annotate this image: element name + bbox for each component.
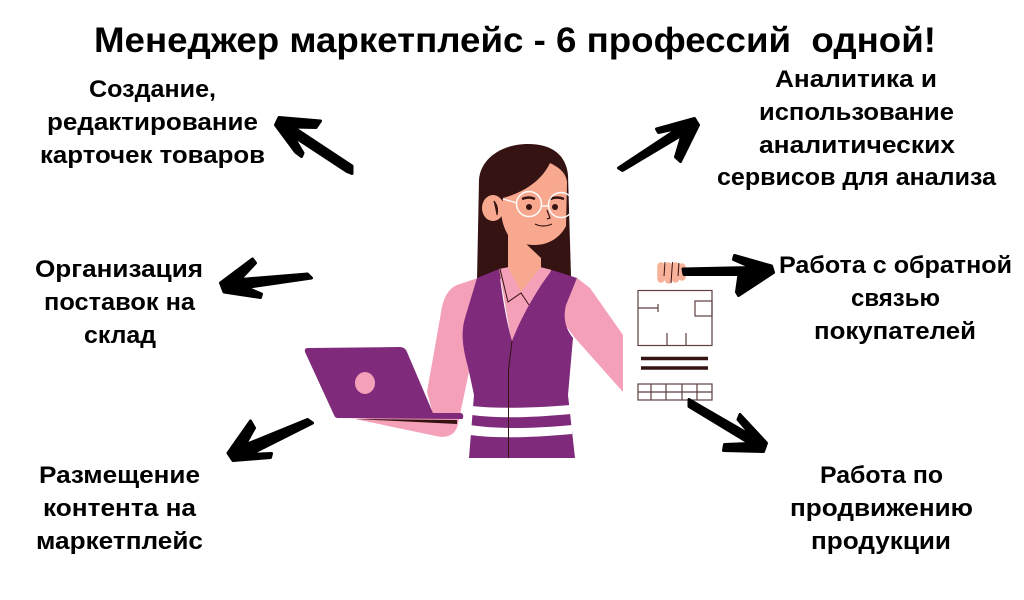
text: analytics bbox=[717, 66, 996, 191]
text: warehouse supply: склад bbox=[84, 322, 156, 349]
arrow: top left bbox=[276, 118, 352, 174]
text: product promotion: продукции bbox=[811, 528, 951, 555]
arrow: top right bbox=[618, 118, 698, 170]
right arm bbox=[560, 278, 623, 392]
hand bbox=[661, 262, 682, 283]
text: card creation: Создание, bbox=[89, 76, 216, 103]
text: content placement: контента на bbox=[43, 495, 196, 522]
neck bbox=[508, 230, 541, 292]
text: card creation bbox=[40, 76, 265, 169]
document bbox=[638, 290, 712, 400]
arrow: middle left bbox=[220, 259, 312, 298]
text: analytics: Аналитика и bbox=[775, 66, 937, 93]
illustration: woman with laptop and document bbox=[305, 144, 712, 458]
text: content placement: Размещение bbox=[39, 462, 200, 489]
laptop bbox=[305, 347, 463, 424]
brows bbox=[522, 198, 564, 199]
vest centre seam bbox=[508, 341, 512, 458]
text: analytics: сервисов для анализа bbox=[717, 164, 996, 191]
arrow: bottom right bbox=[689, 400, 766, 452]
text: product promotion bbox=[790, 462, 973, 555]
arrow: bottom left bbox=[228, 420, 312, 460]
left arm bbox=[355, 278, 480, 437]
text: warehouse supply: Организация bbox=[35, 256, 203, 283]
text: product promotion: продвижению bbox=[790, 495, 973, 522]
shirt front bbox=[499, 267, 552, 345]
text: content placement: маркетплейс bbox=[36, 528, 203, 555]
text: content placement bbox=[36, 462, 203, 555]
text: analytics: использование bbox=[759, 99, 954, 126]
nose and smile bbox=[535, 210, 552, 226]
text: analytics: аналитических bbox=[759, 132, 955, 159]
glasses bbox=[503, 192, 574, 218]
hair bbox=[477, 144, 571, 280]
text: customer feedback: покупателей bbox=[814, 318, 976, 345]
text: product promotion: Работа по bbox=[820, 462, 943, 489]
arrow: middle right bbox=[683, 256, 774, 296]
text: customer feedback: связью bbox=[851, 285, 940, 312]
text: customer feedback bbox=[779, 252, 1012, 345]
ear bbox=[482, 195, 504, 221]
text: warehouse supply: поставок на bbox=[44, 289, 195, 316]
eyes bbox=[526, 204, 532, 210]
text: customer feedback: Работа с обратной bbox=[779, 252, 1012, 279]
text: card creation: карточек товаров bbox=[40, 142, 265, 169]
vest bbox=[463, 269, 577, 458]
title: Менеджер маркетплейс - 6 профессий одной! bbox=[94, 21, 936, 60]
vest stripes bbox=[472, 405, 571, 417]
collar lines bbox=[500, 269, 552, 305]
text: warehouse supply bbox=[35, 256, 203, 349]
face bbox=[501, 163, 567, 245]
text: card creation: редактирование bbox=[47, 109, 258, 136]
